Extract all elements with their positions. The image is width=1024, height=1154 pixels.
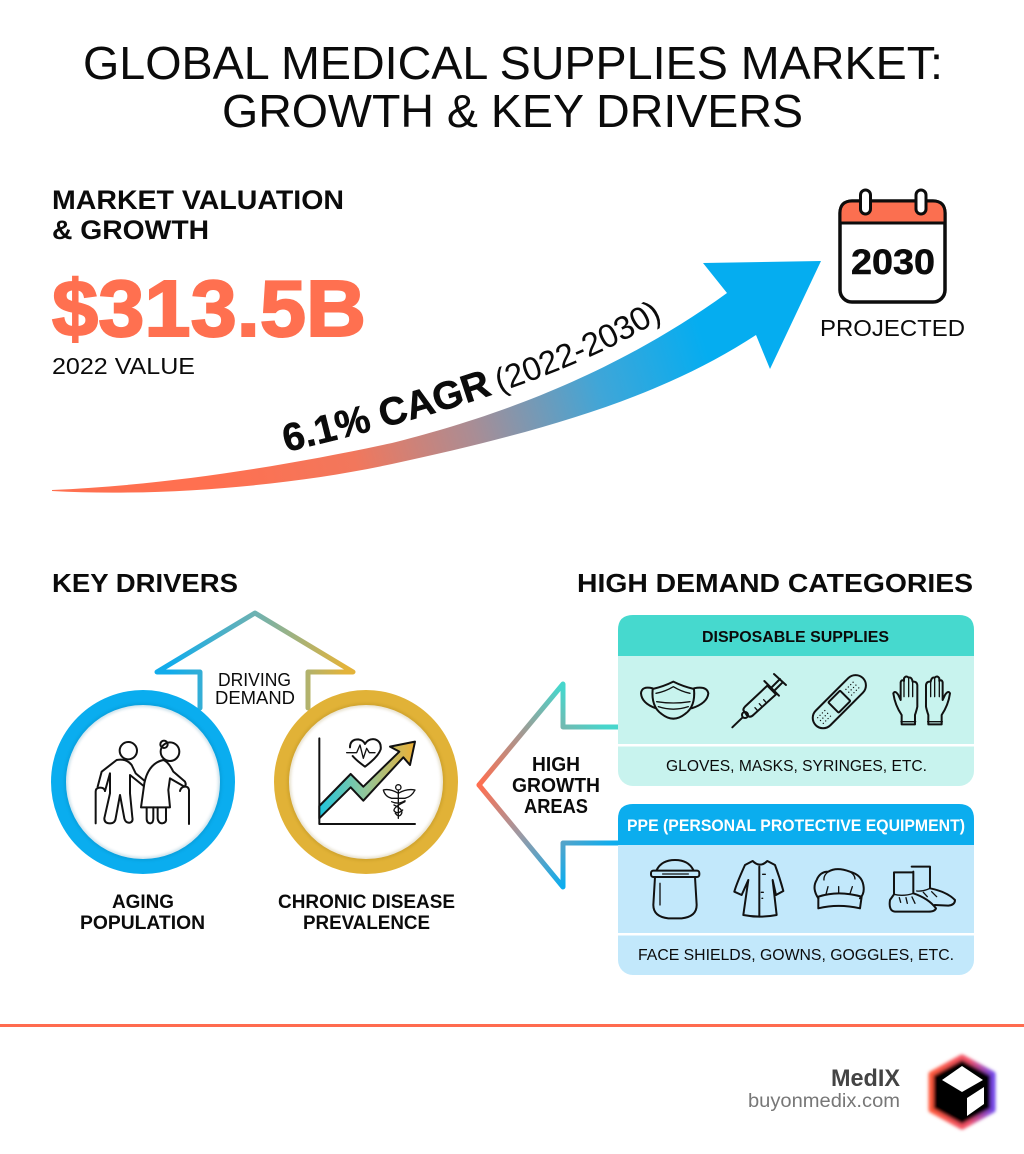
label: aging population: POPULATION: [80, 913, 205, 934]
arrow: high growth areas: [479, 684, 618, 887]
label: high growth areas: [512, 754, 600, 818]
icon: shoe covers: [890, 867, 955, 912]
label: high growth areas: HIGH: [532, 754, 580, 776]
label: aging population: AGING: [112, 892, 174, 913]
icon: surgical cap: [815, 869, 864, 908]
label: driving demand: DEMAND: [215, 688, 295, 708]
panel: personal protective equipment: [618, 804, 974, 975]
caption: projected: PROJECTED: [820, 315, 965, 341]
driver: chronic disease prevalence: [278, 698, 455, 934]
panel header: disposable supplies: [618, 615, 974, 656]
panel: disposable supplies: [618, 615, 974, 786]
label: driving demand: [215, 670, 295, 708]
caption: face shields, gowns, goggles: FACE SHIELDS, GOWNS, GOGGLES, ETC.: [638, 947, 954, 964]
arrow: driving demand: [157, 613, 353, 708]
icon: elderly couple: [96, 741, 189, 824]
icon: calendar 2030: [840, 190, 945, 302]
logo: MedIX cube: [931, 1057, 993, 1127]
driver: aging population: [58, 698, 228, 934]
icon: face mask: [641, 682, 708, 719]
heading: high demand categories: HIGH DEMAND CATEGORIES: [577, 568, 973, 598]
icon: bandage: [808, 671, 870, 733]
ring: gold: [282, 698, 450, 866]
label: chronic disease prevalence: CHRONIC DISEASE: [278, 892, 455, 913]
label: high growth areas: GROWTH: [512, 775, 600, 797]
heading: market valuation and growth: & GROWTH: [52, 215, 209, 245]
icon: calendar 2030: 2030: [851, 243, 935, 282]
big value: 313.5B: $313.5B: [52, 264, 366, 353]
icon: syringe: [732, 674, 786, 727]
footer brand text: MedIX: [831, 1065, 900, 1092]
growth arrow: [52, 261, 821, 493]
panel header: PPE: PPE (PERSONAL PROTECTIVE EQUIPMENT): [627, 816, 965, 835]
icon: rising chart with heart and caduceus: [319, 738, 415, 824]
icon: gown: [734, 861, 783, 917]
CAGR label: 6.1% CAGR(2022-2030): [283, 302, 660, 450]
title: GROWTH & KEY DRIVERS: [222, 85, 803, 137]
label: driving demand: DRIVING: [218, 670, 291, 690]
panel header: PPE: [618, 804, 974, 845]
footer brand text: buyonmedix.com: [748, 1091, 900, 1112]
label: chronic disease prevalence: PREVALENCE: [303, 913, 430, 934]
ring: blue: [58, 698, 228, 866]
icon: face shield: [651, 860, 699, 918]
title: GLOBAL MEDICAL SUPPLIES MARKET:: [83, 37, 943, 89]
label: aging population: [80, 892, 205, 934]
footer rule: [0, 1024, 1024, 1027]
heading: key drivers: KEY DRIVERS: [52, 568, 238, 598]
label: chronic disease prevalence: [278, 892, 455, 934]
icon: gloves: [893, 676, 950, 724]
caption: gloves, masks, syringes: GLOVES, MASKS, SYRINGES, ETC.: [666, 758, 927, 775]
title: [83, 37, 943, 137]
label: high growth areas: AREAS: [524, 796, 588, 818]
caption: 2022 value: 2022 VALUE: [52, 353, 195, 379]
heading: market valuation and growth: MARKET VALUATION: [52, 185, 344, 215]
footer brand text: [748, 1065, 900, 1112]
heading: market valuation and growth: [52, 185, 344, 245]
panel header: disposable supplies: DISPOSABLE SUPPLIES: [702, 629, 889, 646]
